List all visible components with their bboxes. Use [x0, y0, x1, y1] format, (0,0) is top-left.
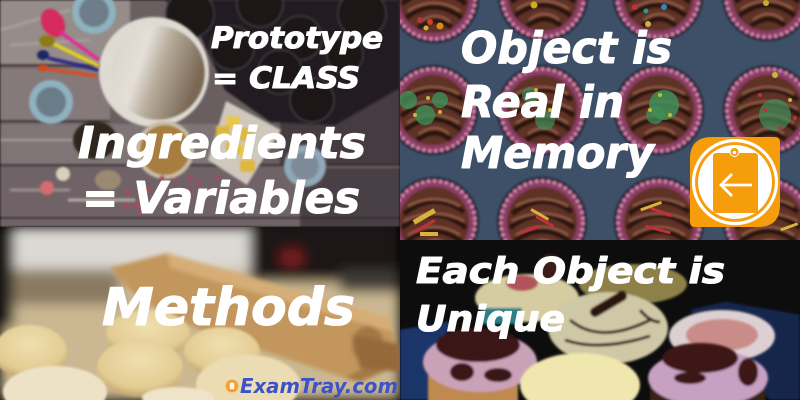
logo: ExamTray.com: ExamTray.com: [240, 374, 398, 398]
photo: back cupcakes: [475, 254, 775, 362]
heading: = CLASS: = CLASS: [212, 61, 360, 95]
photo: rolling pin: [110, 253, 400, 382]
heading: Real in: Real in: [461, 77, 624, 128]
panel: methods rolling pin photo: [0, 222, 400, 400]
heading: Unique: Unique: [416, 299, 565, 340]
photo: sugar bowl, butter and garnishes: [40, 101, 281, 214]
panel: object is real cupcakes photo: [400, 0, 800, 240]
heading: = Variables: = Variables: [82, 173, 360, 224]
photo: wooden table background: [0, 0, 400, 227]
photo: dark background and blue plate: [400, 240, 800, 400]
icon: orange clipboard with back arrow: [690, 137, 780, 227]
heading: Memory: Memory: [461, 128, 656, 179]
photo: rows of chocolate cupcakes: [400, 0, 800, 240]
photo: dark muffin tin: [165, 0, 400, 125]
photo: blurred kitchen background: [0, 222, 400, 400]
panel: each object is unique cupcakes photo: [400, 240, 800, 400]
panel: prototype and ingredients photo: [0, 0, 400, 227]
photo: paper baking cups: [29, 0, 326, 187]
heading: Object is: Object is: [461, 23, 672, 74]
photo: bowl of flour: [99, 17, 209, 127]
photo: front cupcakes: [423, 328, 768, 400]
photo: dough balls: [0, 310, 300, 400]
photo: sprinkles: [399, 0, 798, 236]
photo: measuring spoons: [36, 5, 99, 76]
heading: Ingredients: Ingredients: [78, 118, 366, 169]
heading: Methods: Methods: [102, 278, 355, 338]
photo: blue baking tin: [400, 0, 800, 240]
photo: centre swirl cupcake: [548, 292, 668, 364]
heading: Prototype: Prototype: [211, 21, 383, 55]
heading: Each Object is: Each Object is: [416, 251, 725, 292]
